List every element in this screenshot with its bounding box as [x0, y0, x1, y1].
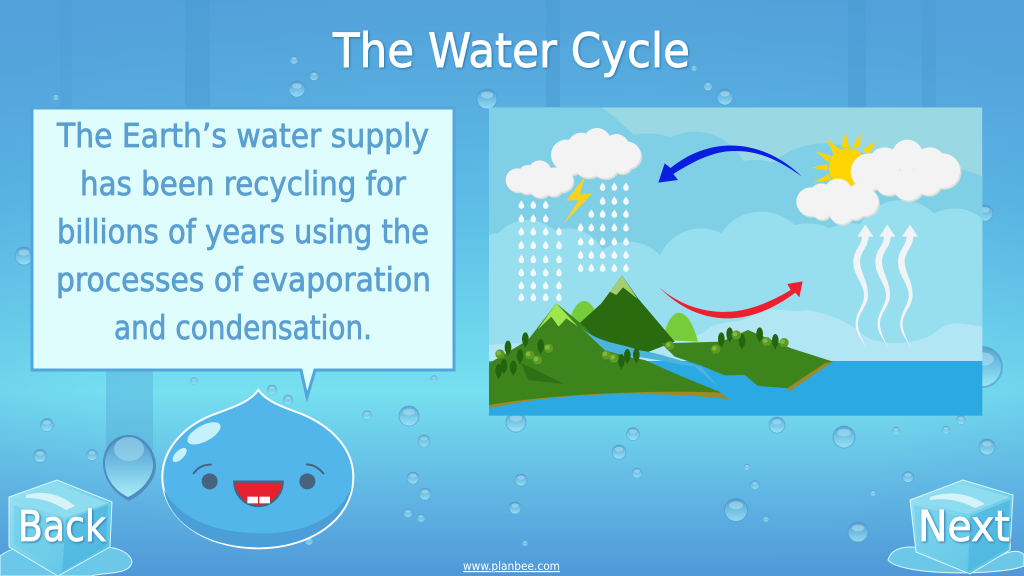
next button [888, 480, 1024, 574]
bubble panel [32, 108, 454, 397]
lightning [564, 177, 592, 223]
sun [811, 133, 876, 187]
label: Back [18, 502, 106, 552]
eyebrows [194, 464, 323, 473]
body shadow [164, 485, 352, 547]
speech bubble [32, 108, 454, 397]
ice cube [888, 480, 1024, 574]
sea [489, 361, 982, 416]
bubble text: billions of years using the [57, 212, 429, 251]
bubble text: and condensation. [114, 308, 372, 347]
blue arrow [658, 145, 802, 183]
bubble text [56, 116, 431, 347]
character: water drop [162, 390, 353, 548]
highlights [170, 418, 224, 464]
back button [0, 480, 132, 576]
clouds [506, 128, 960, 224]
bubble text: The Earth’s water supply [56, 116, 429, 155]
teeth [247, 497, 270, 503]
sky [489, 108, 982, 388]
large teardrop [103, 435, 156, 501]
rain [518, 182, 629, 301]
bubble text: processes of evaporation [56, 260, 431, 299]
red arrow [659, 281, 803, 318]
mouth [234, 482, 283, 506]
water cycle picture [489, 108, 982, 416]
title: The Water Cycle [332, 24, 690, 79]
bubble text: has been recycling for [80, 164, 406, 203]
label: Next [918, 502, 1010, 552]
eyes [202, 473, 315, 489]
landscape [489, 275, 833, 408]
body [162, 390, 353, 548]
ice cube [0, 480, 132, 576]
website link: www.planbee.com [463, 559, 560, 573]
evaporation arrows [853, 225, 918, 348]
